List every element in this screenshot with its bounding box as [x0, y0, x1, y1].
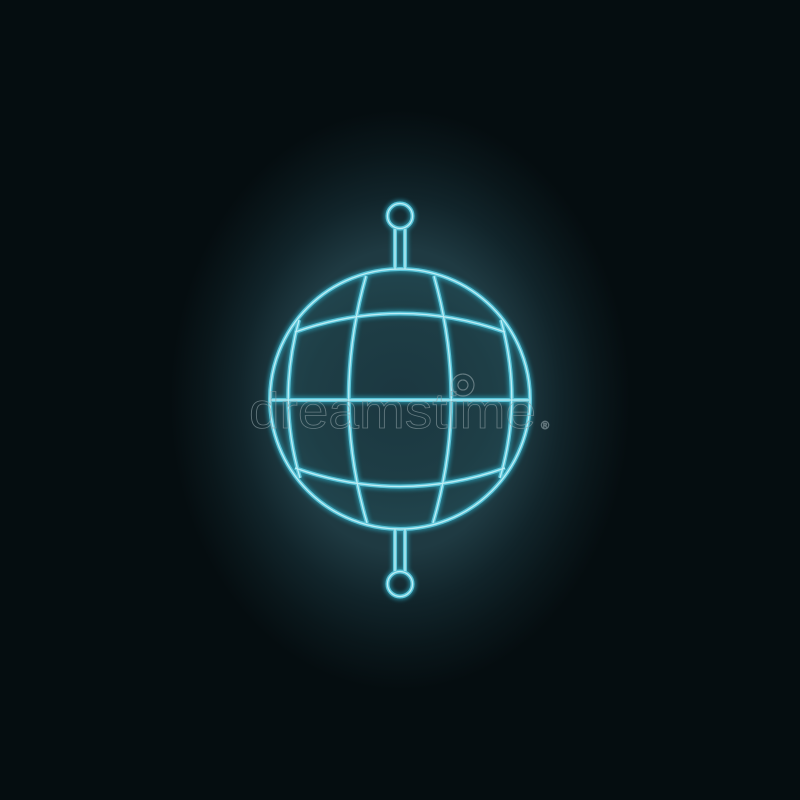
watermark wordmark: dreamstime — [249, 383, 536, 439]
watermark registered mark: ® — [541, 420, 549, 432]
watermark swirl — [452, 374, 474, 396]
top ring — [388, 204, 412, 228]
lower latitude — [295, 468, 505, 486]
globe outline — [270, 269, 530, 529]
neon line highlights — [270, 204, 530, 596]
equator — [271, 398, 529, 402]
inner right meridian — [433, 276, 451, 523]
bottom ring — [388, 572, 412, 596]
upper latitude — [295, 314, 505, 332]
inner left meridian — [349, 276, 367, 523]
background glow — [170, 110, 630, 690]
outer left meridian — [288, 320, 300, 478]
top stem — [395, 229, 405, 269]
globe glow halo — [270, 204, 530, 596]
globe disc — [270, 269, 530, 529]
globe neon lines — [270, 204, 530, 596]
watermark — [249, 374, 549, 439]
outer right meridian — [500, 320, 512, 478]
bottom stem — [395, 529, 405, 571]
